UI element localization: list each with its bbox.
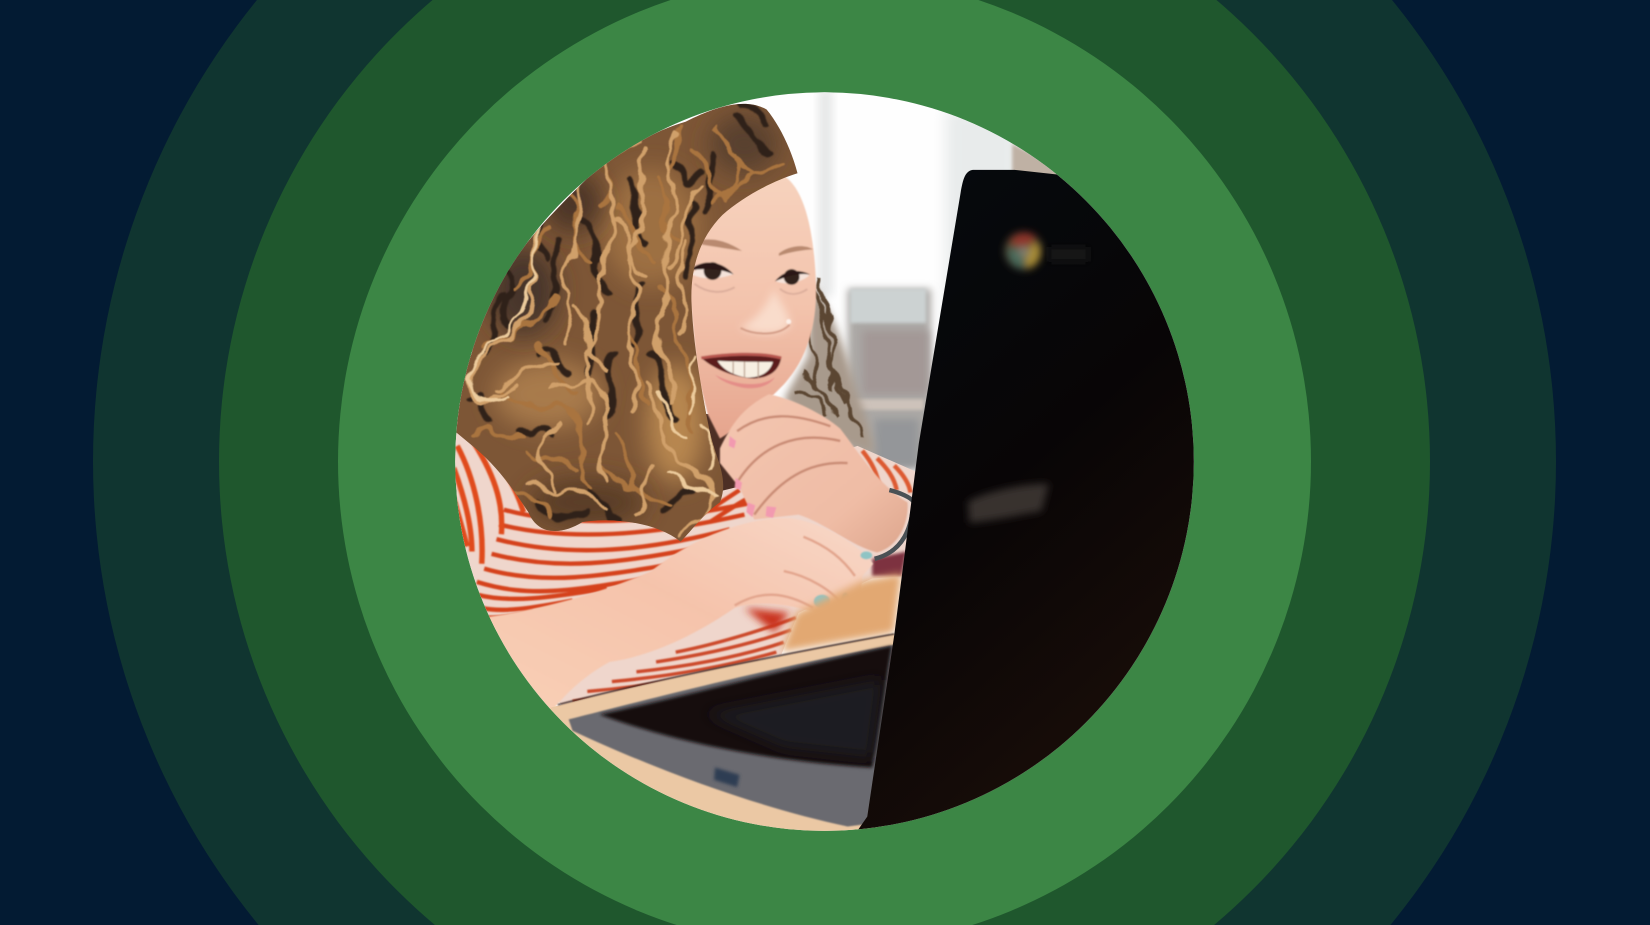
wooden table (538, 574, 902, 866)
blurred Chrome logo (1005, 232, 1042, 270)
typing arm and hand (479, 518, 873, 716)
inner ring (338, 0, 1311, 925)
chin-resting hand (720, 394, 908, 552)
curly hair (456, 104, 798, 542)
middle ring (219, 0, 1430, 925)
neck shadow behind hair and hand (706, 414, 736, 490)
circular photo: girl using a laptop (455, 92, 1194, 831)
laptop lid (858, 170, 1194, 830)
hair behind the face (784, 276, 875, 453)
smile (701, 354, 781, 388)
bracelet (875, 490, 914, 559)
laptop keyboard base (569, 645, 894, 826)
face (688, 176, 816, 439)
blurred laptop brand mark (968, 484, 1049, 523)
striped shirt (450, 394, 919, 706)
library background (440, 80, 1210, 850)
